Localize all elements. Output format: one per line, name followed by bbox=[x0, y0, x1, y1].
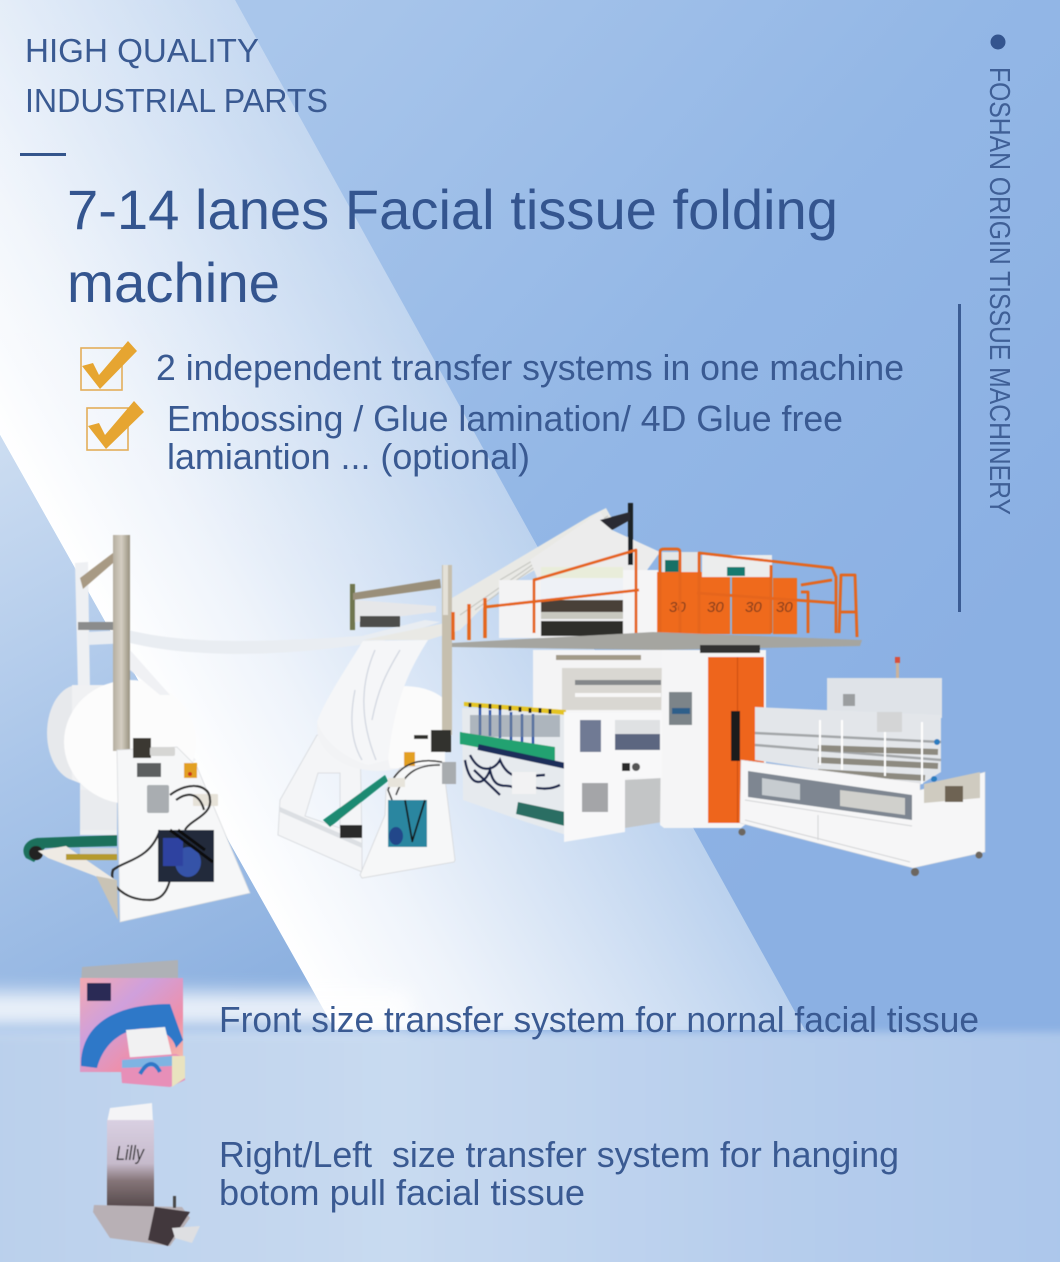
vertical company name: FOSHAN ORIGIN TISSUE MACHINERY bbox=[983, 67, 1015, 515]
back frame bbox=[75, 553, 118, 835]
header text: high quality industrial parts: INDUSTRIAL PARTS bbox=[25, 82, 328, 119]
second roll bbox=[317, 685, 445, 771]
product: hanging tissue pack bbox=[93, 1103, 200, 1246]
orange panels: 30 bbox=[776, 599, 793, 616]
dark fittings under deck bbox=[700, 645, 760, 653]
main title: machine bbox=[67, 251, 280, 314]
icon: check box two bbox=[87, 401, 144, 450]
guard rails bbox=[755, 707, 941, 785]
main title: 7-14 lanes Facial tissue folding bbox=[67, 178, 838, 241]
orange panels: 30 bbox=[669, 599, 686, 616]
orange door column bbox=[660, 650, 766, 828]
tissue web from roll bbox=[88, 620, 440, 654]
top sheet tower bbox=[530, 503, 660, 585]
back cabinet bbox=[827, 657, 942, 718]
embossing rollers bbox=[541, 567, 623, 636]
feature text: lamination options: Embossing / Glue lamination/ 4D Glue free bbox=[167, 398, 843, 439]
icon: check box one bbox=[81, 341, 137, 390]
teal window bbox=[388, 800, 427, 847]
upright post bbox=[113, 535, 130, 751]
side dot bbox=[990, 34, 1006, 50]
header text: high quality industrial parts: HIGH QUALITY bbox=[25, 32, 259, 69]
vertical rule bbox=[958, 304, 961, 612]
unit: packing table bbox=[738, 657, 985, 876]
hanging tissue description: Right/Left size transfer system for hanging bbox=[219, 1134, 899, 1175]
plastic wrap top bbox=[81, 960, 178, 985]
upright post two bbox=[442, 565, 452, 735]
pack swirl bbox=[81, 1004, 183, 1068]
equipment on deck bbox=[662, 552, 772, 577]
left infeed frame bbox=[460, 702, 584, 835]
unit: first unwind stand bbox=[23, 535, 440, 922]
table frame bbox=[738, 760, 985, 876]
main title bbox=[67, 178, 838, 314]
background: diagonal white light band bbox=[0, 0, 805, 1030]
side plate bbox=[117, 747, 250, 922]
unit: second unwind stand bbox=[278, 508, 615, 878]
standing pack body bbox=[107, 1120, 154, 1207]
blue motor window bbox=[158, 830, 214, 882]
small pack bbox=[120, 1054, 185, 1087]
tissue pop-up bbox=[126, 1027, 172, 1058]
short dash under header bbox=[20, 153, 66, 156]
orange panels: 30 bbox=[707, 599, 724, 616]
header text: high quality industrial parts bbox=[25, 32, 328, 119]
background: pale floor area bbox=[0, 992, 1060, 1262]
standing pack top bbox=[107, 1103, 153, 1122]
orange railing bbox=[485, 549, 857, 637]
front size description: Front size transfer system for nornal facial tissue bbox=[219, 999, 979, 1040]
cables bbox=[112, 786, 210, 900]
pack body bbox=[80, 978, 183, 1072]
pack label bbox=[87, 983, 111, 1001]
orange panels: 30 bbox=[745, 599, 762, 616]
side plate two bbox=[360, 763, 455, 878]
hanging tissue description: botom pull facial tissue bbox=[219, 1172, 585, 1213]
parent tissue roll bbox=[47, 680, 196, 805]
white embossing body bbox=[499, 580, 659, 638]
white side plate with windows bbox=[564, 712, 662, 842]
hanging tissue description bbox=[219, 1134, 899, 1213]
product: front size tissue pack bbox=[80, 960, 185, 1087]
lying pack bbox=[93, 1196, 200, 1246]
feature text: transfer systems: 2 independent transfer systems in one machine bbox=[156, 347, 904, 388]
feature text: lamination options: lamiantion ... (optional) bbox=[167, 436, 530, 477]
fold section detail bbox=[556, 655, 662, 828]
outfeed conveyor bbox=[23, 835, 118, 920]
lower white housing bbox=[533, 650, 665, 810]
side frame bbox=[278, 735, 362, 872]
feature text: lamination options bbox=[167, 398, 843, 477]
green belt bbox=[323, 775, 388, 827]
unit: upper embossing deck bbox=[452, 503, 862, 650]
brand name on pack: Lilly bbox=[116, 1143, 145, 1165]
orange panels bbox=[657, 572, 797, 634]
crossbar bbox=[350, 579, 441, 630]
unit: main folder body bbox=[460, 645, 766, 842]
control and cables bbox=[388, 730, 456, 800]
tissue web sheets bbox=[317, 508, 615, 765]
deck plate bbox=[452, 632, 862, 650]
machine: complete production line bbox=[23, 503, 985, 922]
brake and motor bbox=[133, 738, 218, 813]
